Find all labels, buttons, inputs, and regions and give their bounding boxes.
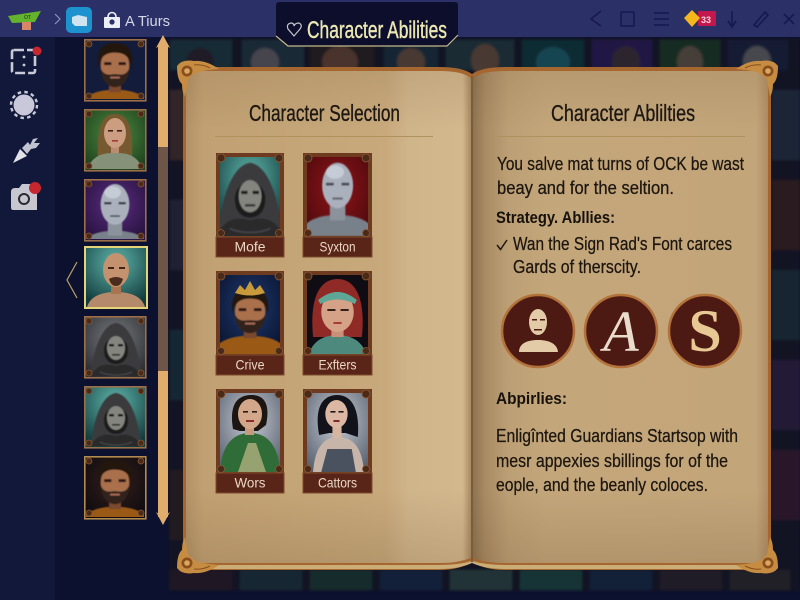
intro text — [497, 154, 744, 198]
icon: close — [784, 14, 794, 24]
ornament: bottom-right corner — [736, 537, 778, 573]
bottom page block — [186, 561, 768, 569]
icon: arrow down — [728, 11, 736, 27]
subheading: strategy: Strategy. Abllies: — [496, 208, 615, 227]
top bar — [0, 0, 800, 37]
left sidebar — [0, 37, 168, 600]
book cover edge — [183, 67, 771, 570]
checklist item: Gards of therscity. — [513, 257, 641, 277]
icon: pencil — [754, 12, 768, 27]
character card: Mofe: Mofe — [234, 238, 266, 254]
breadcrumb label: A Tiurs — [125, 14, 170, 30]
right page heading: Character Ablilties — [551, 100, 695, 126]
thumbnail: dark bearded man — [79, 457, 151, 526]
icon: menu — [654, 13, 669, 25]
heading rule — [497, 136, 745, 137]
title text: Character Abilities — [307, 17, 447, 44]
ornament: bottom-left corner — [177, 537, 219, 573]
icon: dashed frame with badge — [12, 46, 42, 73]
icon: diamond currency with badge — [684, 10, 716, 27]
icon: gear — [11, 92, 37, 118]
icon: diamond currency with badge: 33 — [701, 15, 711, 25]
character card: Exfters — [303, 271, 372, 375]
intro text: You salve mat turns of OCK be wast — [497, 154, 744, 174]
ability icon: letter S — [669, 295, 741, 367]
left page — [186, 71, 471, 563]
ability icon: letter S: S — [688, 298, 722, 364]
checklist item: Wan the Sign Rad's Font carces — [513, 234, 732, 254]
closing paragraph — [496, 426, 738, 495]
icon: camera with badge — [11, 182, 41, 210]
icon: share — [591, 11, 601, 26]
thumbnail: bearded man — [79, 40, 151, 109]
closing paragraph: mesr appexies sbillings for of the — [496, 451, 728, 471]
left page heading: Character Selection — [249, 100, 400, 126]
thumbnail: selected bald man — [85, 247, 147, 308]
scrollbar — [156, 35, 170, 525]
thumbnail: woman on green — [85, 110, 146, 171]
closing paragraph: Enligînted Guardians Startsop with — [496, 426, 738, 446]
arrow: left chevron — [67, 262, 77, 298]
character card: Cattors: Cattors — [318, 474, 357, 490]
character card: Crive — [212, 271, 288, 375]
icon: green logo: OT — [24, 15, 31, 21]
arrow: breadcrumb chevron — [55, 14, 60, 24]
icon: shopping bag — [104, 12, 120, 28]
ability icon: letter A: A — [599, 299, 639, 364]
icon: brush tool — [13, 138, 40, 163]
intro text: beay and for the seltion. — [497, 178, 674, 198]
character card: Syxton — [299, 153, 376, 257]
heading rule — [215, 136, 433, 137]
top-right toolbar icons — [591, 11, 794, 27]
page shading — [186, 71, 768, 563]
thumbnail: teal hooded figure — [85, 387, 146, 448]
character card: Exfters: Exfters — [318, 356, 356, 372]
character card: Syxton: Syxton — [320, 238, 356, 254]
open book — [177, 61, 778, 573]
ornament: top-right corner — [736, 61, 778, 97]
thumbnail: grey man on purple — [79, 180, 151, 250]
character card: Cattors — [303, 389, 372, 493]
icon: green logo — [8, 11, 41, 30]
ability icon: person — [502, 295, 574, 367]
icon: heart outline — [287, 23, 301, 36]
ability icons row — [502, 295, 741, 367]
icon: blue app tile — [66, 7, 92, 33]
character card: Mofe — [216, 153, 284, 257]
title tab — [276, 2, 458, 46]
icon: document — [621, 12, 634, 26]
character thumbnail column — [79, 40, 151, 526]
ability icon: letter A — [585, 295, 657, 367]
character card: Wors: Wors — [234, 474, 266, 490]
spine shadow — [471, 76, 473, 562]
closing paragraph: eople, and the beanly coloces. — [496, 475, 708, 495]
right page — [473, 71, 768, 563]
ornament: top-left corner — [177, 61, 219, 97]
thumbnail: grey hooded figure — [85, 317, 146, 378]
character card: Crive: Crive — [236, 356, 265, 372]
character card: Wors — [216, 389, 284, 493]
subheading: abpirlies: Abpirlies: — [496, 389, 567, 408]
checklist item — [497, 234, 732, 277]
dimmed background tile grid — [168, 38, 800, 591]
